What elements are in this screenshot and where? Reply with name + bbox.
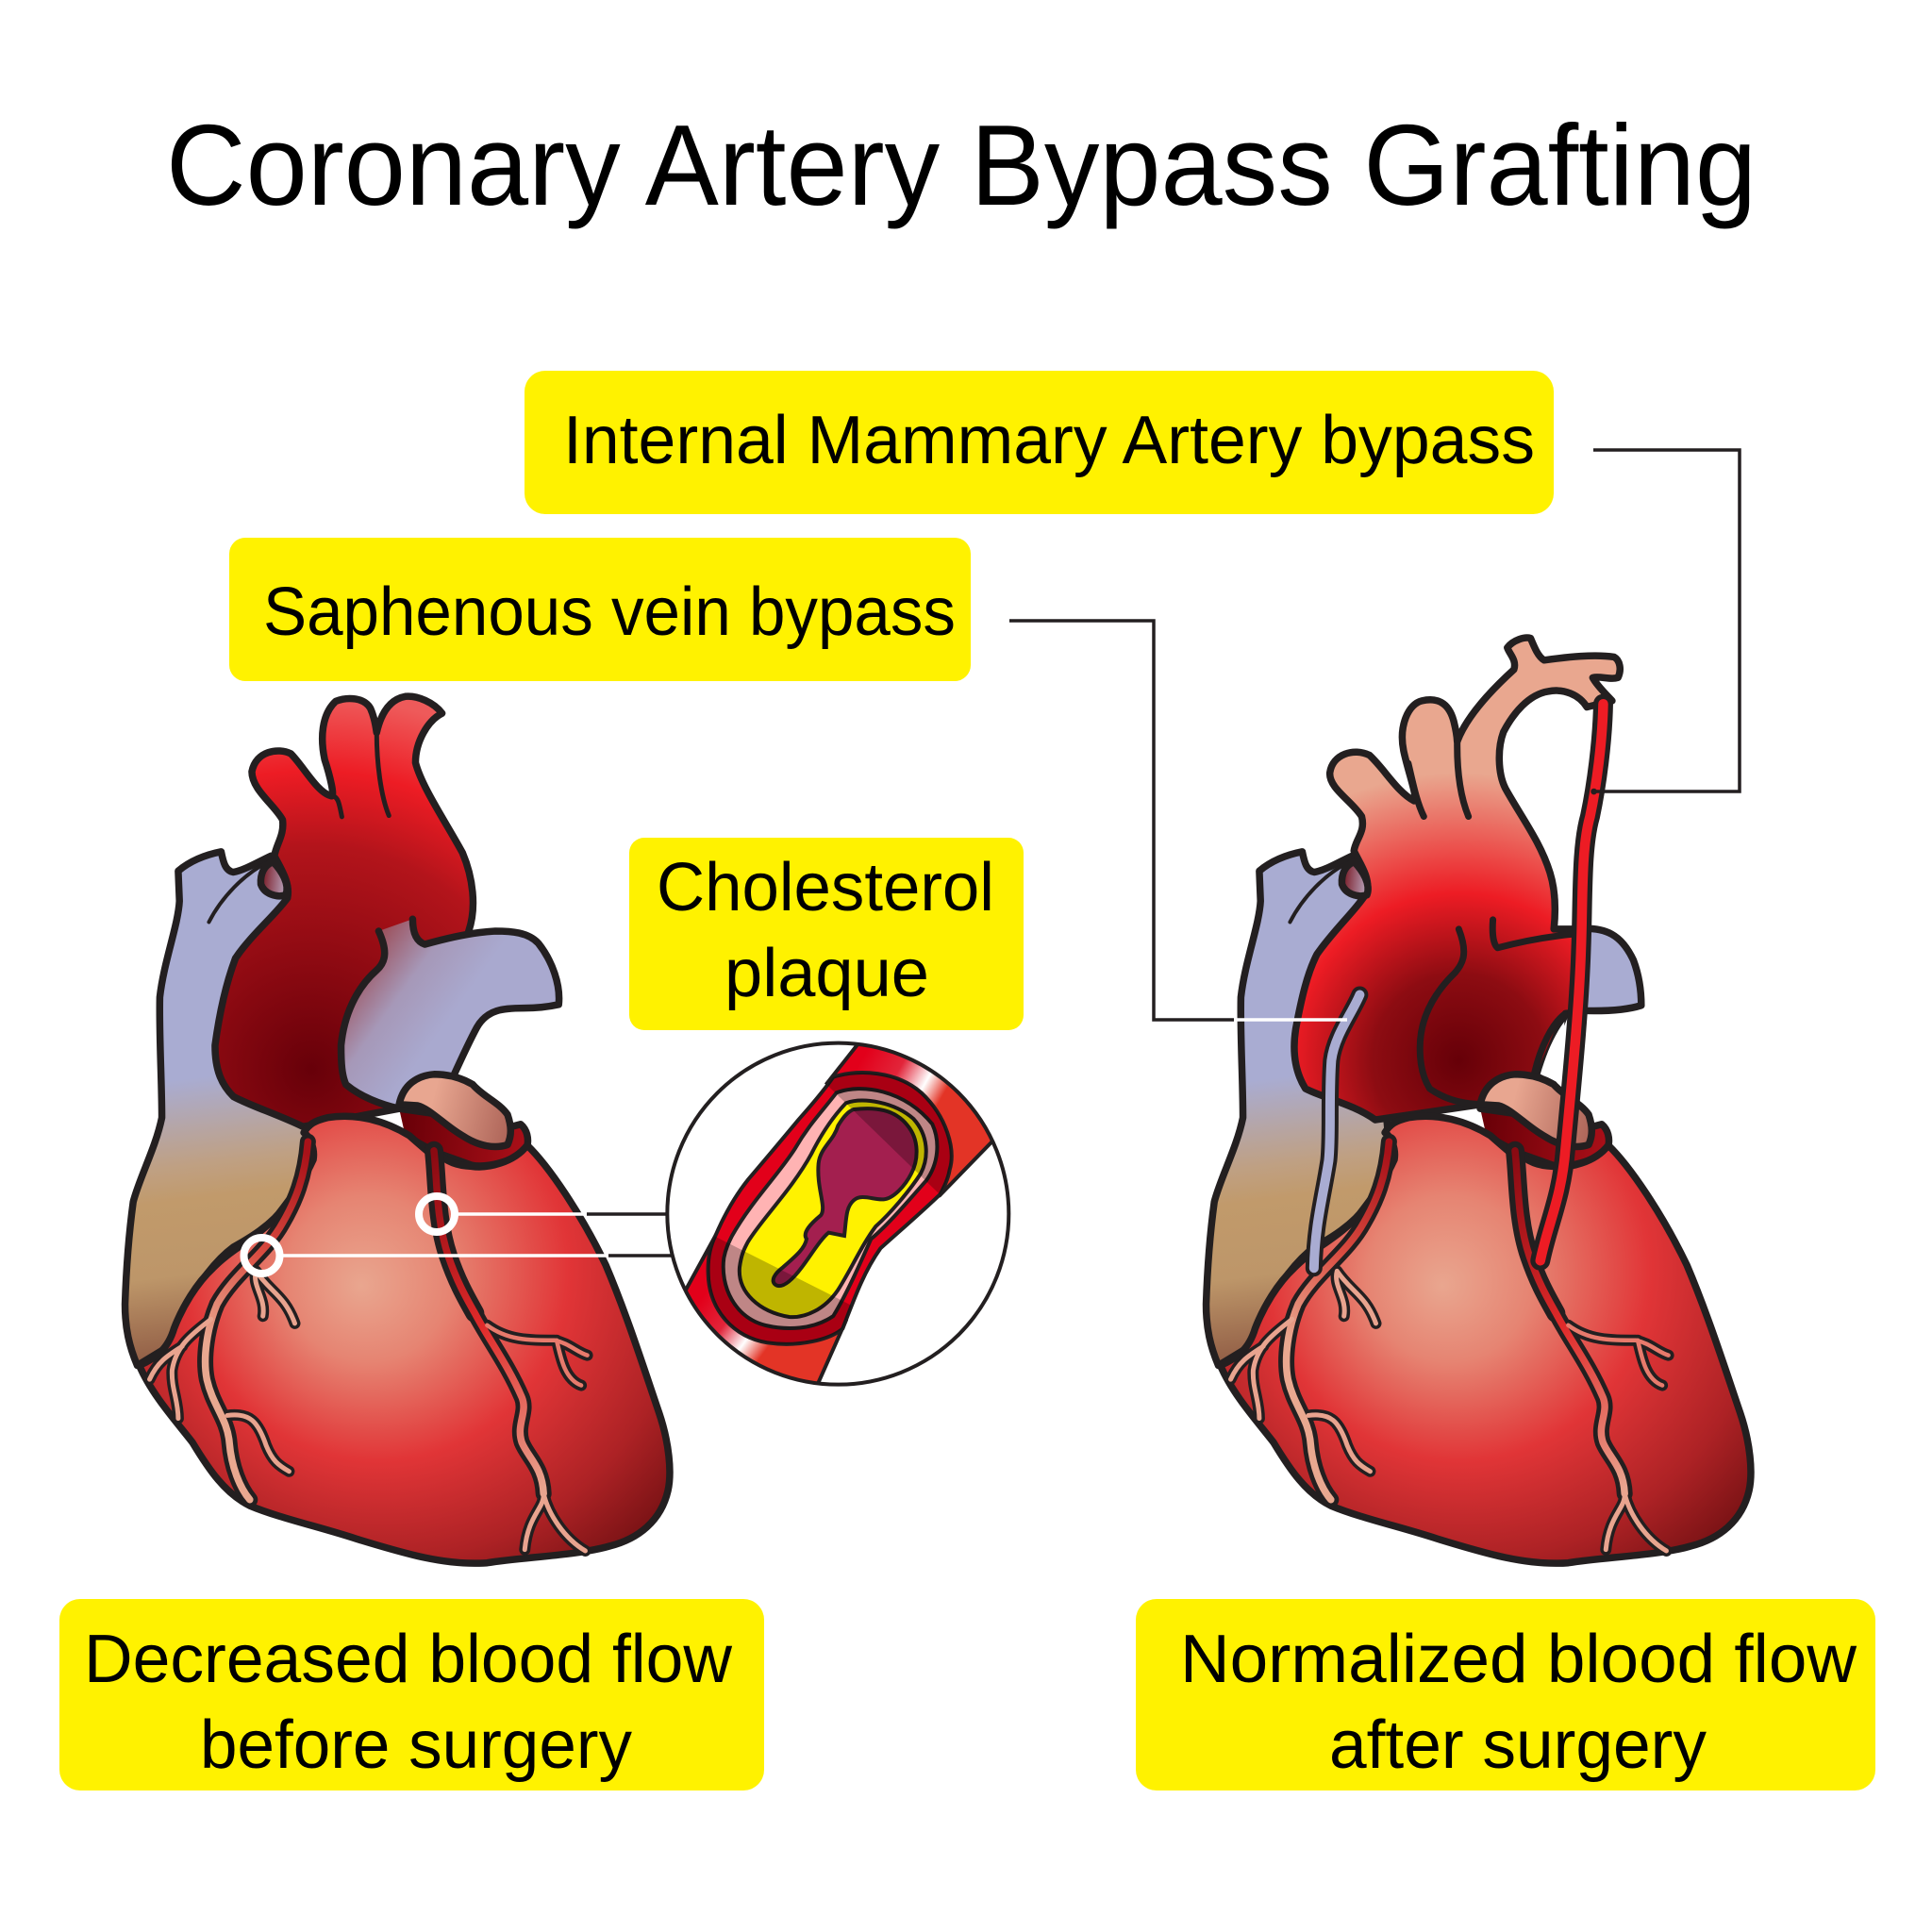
left anterior descending artery xyxy=(1515,1151,1669,1551)
ventricle xyxy=(1221,1116,1751,1563)
label: decreased blood flow: Decreased blood flow xyxy=(84,1622,733,1697)
atrioventricular band xyxy=(399,1108,527,1166)
heart after surgery: ventricle and coronaries xyxy=(1221,862,1751,1563)
heart after surgery: atrium xyxy=(1207,852,1389,1366)
small vessel stump xyxy=(1341,862,1368,896)
small vessel stump xyxy=(260,862,287,896)
label: decreased blood flow: before surgery xyxy=(200,1707,632,1783)
heart after surgery: aortic arch and pulmonary artery xyxy=(1294,638,1641,1120)
gap under pulmonary artery xyxy=(1541,1022,1564,1084)
cholesterol plaque xyxy=(740,1101,926,1317)
label: cholesterol plaque: plaque xyxy=(724,936,929,1011)
label: normalized blood flow: after surgery xyxy=(1329,1707,1707,1783)
marker ring: upper blockage xyxy=(419,1196,455,1232)
label: saphenous vein bypass xyxy=(229,538,971,681)
callout lines to inset xyxy=(280,1214,672,1256)
inset: artery cross-section with cholesterol plaque xyxy=(665,1041,1011,1387)
right coronary artery xyxy=(1231,1141,1389,1500)
left anterior descending artery xyxy=(434,1151,588,1551)
aortic arch xyxy=(1294,638,1620,1120)
label: decreased blood flow xyxy=(59,1599,764,1790)
aortic branch folds xyxy=(331,733,389,817)
right coronary artery xyxy=(150,1141,308,1500)
vena cava fold xyxy=(208,862,268,922)
label: saphenous vein bypass: Saphenous vein bypass xyxy=(263,575,956,650)
artery cap bottom xyxy=(685,1234,849,1382)
ventricle xyxy=(140,1116,670,1563)
saphenous vein graft xyxy=(1314,994,1359,1268)
label: normalized blood flow: Normalized blood flow xyxy=(1180,1622,1857,1697)
internal mammary artery graft xyxy=(1541,704,1603,1260)
artery cap top xyxy=(824,1045,992,1198)
artery intima xyxy=(724,1089,937,1328)
shaded end zones xyxy=(708,1073,952,1344)
inset background xyxy=(667,1043,1008,1385)
label: cholesterol plaque: Cholesterol xyxy=(657,850,994,925)
remaining lumen xyxy=(774,1108,917,1286)
arch inner contours xyxy=(1408,741,1574,1105)
aorta xyxy=(215,696,473,1126)
left atrial appendage xyxy=(399,1074,510,1147)
heart before surgery xyxy=(125,696,670,1563)
artery wall xyxy=(708,1073,952,1344)
label: internal mammary artery bypass xyxy=(525,371,1554,514)
leader line: saphenous vein bypass xyxy=(1009,621,1347,1020)
leader line: internal mammary artery bypass xyxy=(1593,450,1740,791)
pulmonary artery blue end xyxy=(1575,928,1641,1011)
left atrial appendage xyxy=(1480,1074,1591,1147)
pulmonary artery xyxy=(341,919,559,1108)
right atrium and vena cava xyxy=(125,852,308,1366)
label: normalized blood flow xyxy=(1136,1599,1875,1790)
label: cholesterol plaque xyxy=(629,838,1024,1030)
title: Coronary Artery Bypass Grafting xyxy=(166,101,1757,229)
inset ring xyxy=(667,1043,1008,1385)
label: internal mammary artery bypass: Internal Mammary Artery bypass xyxy=(563,403,1535,478)
atrioventricular band xyxy=(1480,1108,1608,1166)
marker ring: lower blockage xyxy=(243,1238,279,1274)
